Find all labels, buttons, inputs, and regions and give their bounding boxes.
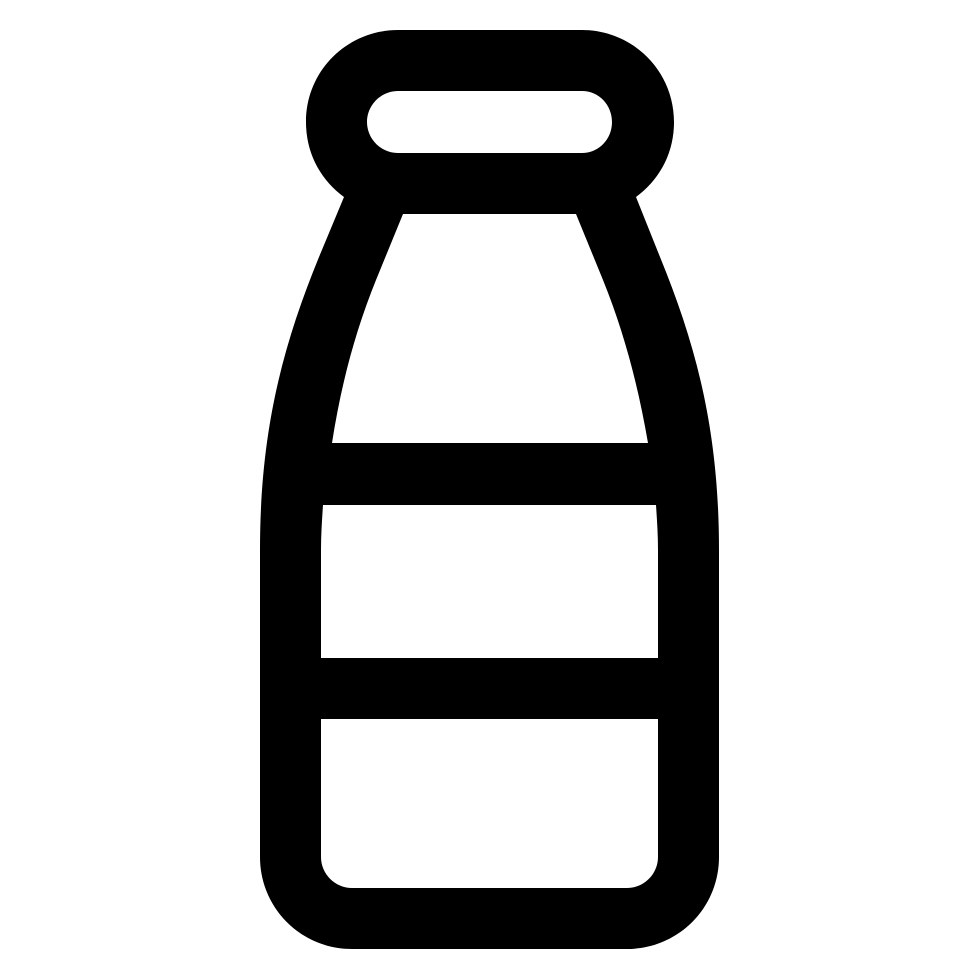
bottle outline [260,30,719,949]
